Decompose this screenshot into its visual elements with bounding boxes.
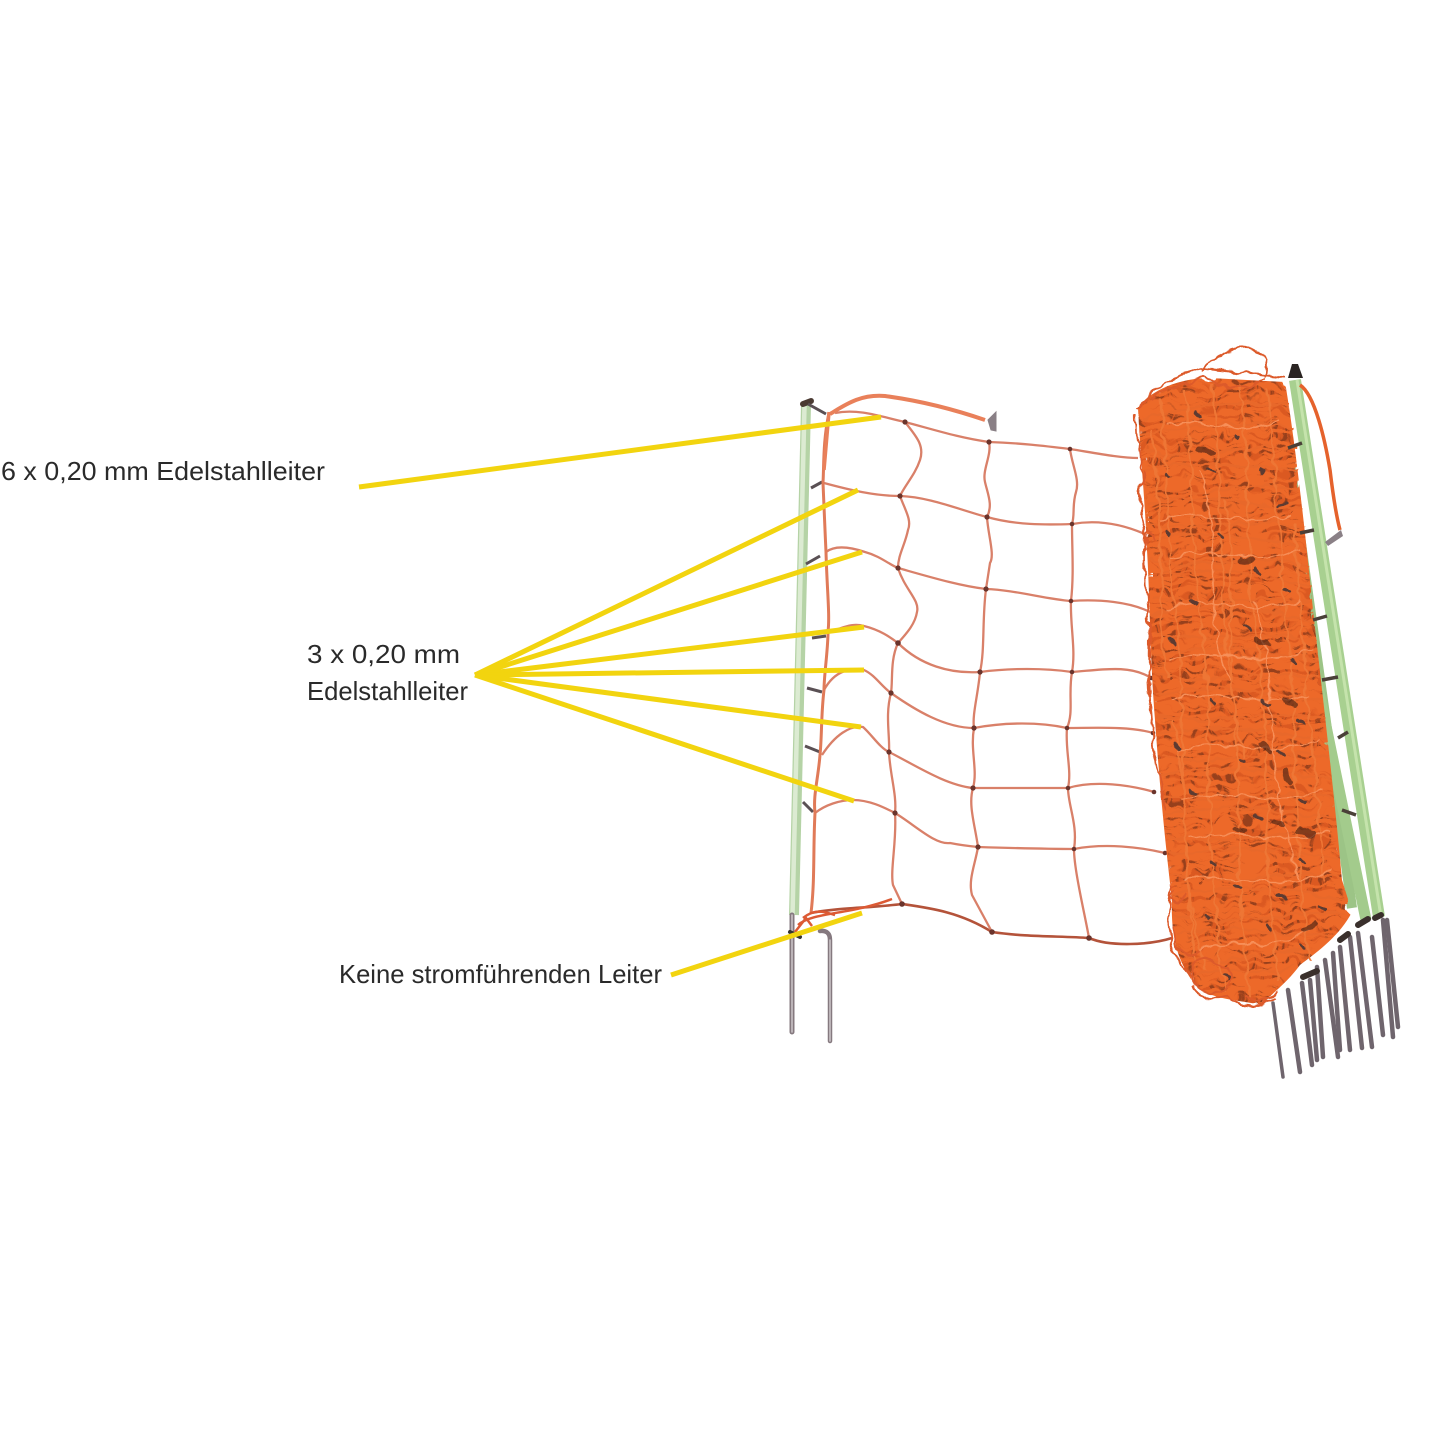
horizontal fibres <box>1142 403 1345 975</box>
post clips <box>803 404 826 812</box>
label: Keine stromführenden Leiter: Keine stromführenden Leiter <box>339 959 662 989</box>
yellow leader: 6 x 0,20 mm <box>359 417 881 487</box>
rolled net body <box>1136 349 1381 1006</box>
vertical fibres <box>1150 385 1325 1000</box>
ground spikes of left post <box>790 915 830 1041</box>
fibres of the roll <box>1142 385 1345 1000</box>
net knots <box>886 419 1167 941</box>
left fence post <box>792 401 826 915</box>
dark knots <box>1165 412 1325 979</box>
bright fibres <box>1160 420 1330 950</box>
ground spikes of rolled posts <box>1273 920 1398 1077</box>
yellow leader fan: 3 x 0,20 mm <box>475 490 864 801</box>
label: 3 x 0,20 mm Edelstahlleiter: Edelstahlleiter <box>307 676 468 706</box>
dark gaps <box>1200 450 1315 930</box>
label: 3 x 0,20 mm Edelstahlleiter <box>307 639 468 706</box>
dark spike sockets <box>1303 915 1381 977</box>
left selvage strand <box>811 413 829 913</box>
vertical strands <box>888 422 921 904</box>
horizontal conductors <box>835 412 1138 458</box>
label: 3 x 0,20 mm Edelstahlleiter: 3 x 0,20 mm <box>307 639 460 669</box>
post cap <box>1288 364 1303 378</box>
top rope with hook <box>824 396 996 470</box>
stacked posts behind roll <box>1281 380 1381 920</box>
yellow leader: keine Leiter <box>671 913 862 975</box>
loose loops around the roll <box>1136 349 1285 1006</box>
bottom knot and strands at post <box>795 899 892 932</box>
open net mesh <box>811 412 1172 944</box>
roll clips <box>1288 443 1356 815</box>
rope hook <box>1325 530 1343 546</box>
label: 6 x 0,20 mm Edelstahlleiter: 6 x 0,20 mm Edelstahlleiter <box>1 456 325 486</box>
rope hanging beside the roll <box>1300 385 1340 530</box>
